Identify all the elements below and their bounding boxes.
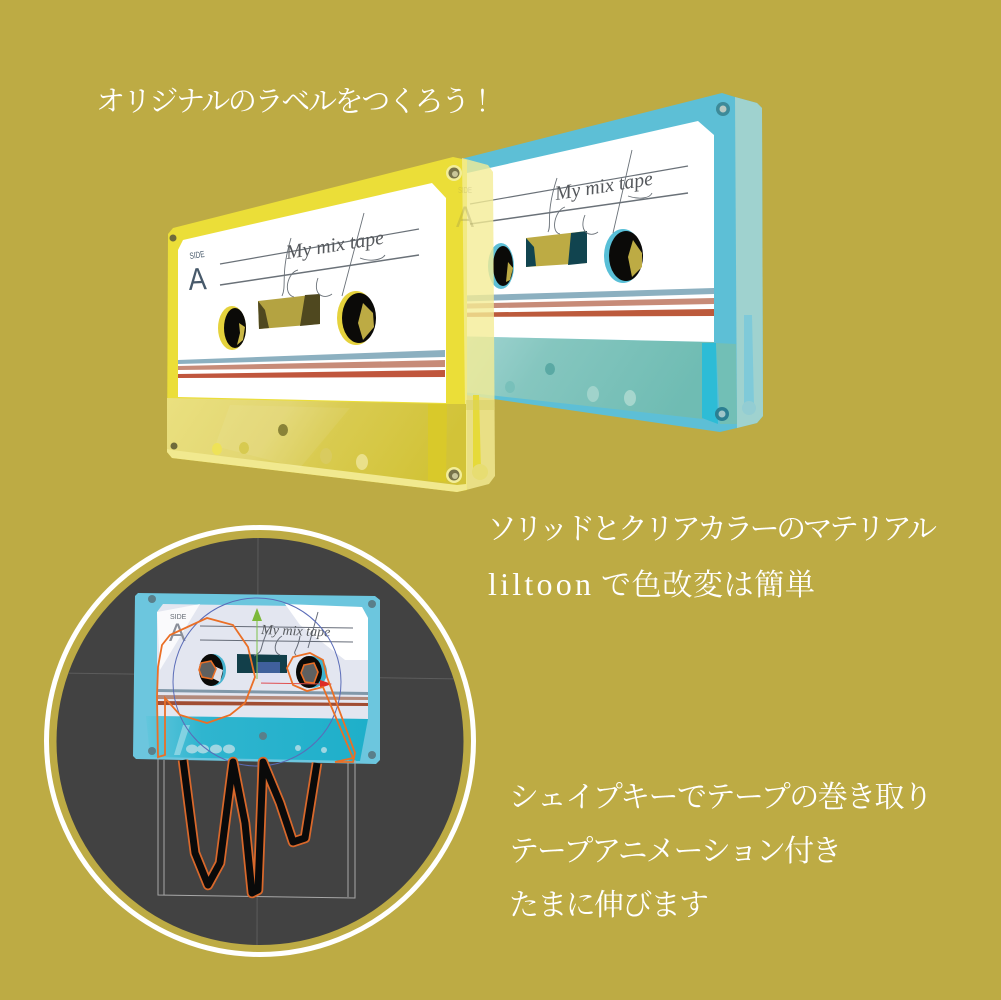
preview cassette lower holes	[186, 744, 327, 754]
gizmo up arrow	[252, 608, 262, 621]
dark disc	[56, 538, 464, 945]
ghost side text of blue cassette	[456, 186, 474, 234]
yellow cassette translucent side panel	[462, 158, 495, 490]
yellow cassette side text	[188, 249, 208, 297]
yellow cassette handwriting lines	[220, 213, 419, 297]
ghost side text of blue cassette: A	[456, 201, 474, 234]
preview cassette handwritten title: My mix tape	[260, 623, 331, 640]
yellow cassette handwritten title: My mix tape	[283, 227, 386, 264]
blue cassette stripes	[445, 288, 714, 302]
yellow cassette side text: A	[188, 261, 208, 297]
blue cassette left reel hole	[488, 243, 514, 289]
blue cassette label	[445, 121, 714, 342]
panel: unity preview circle	[46, 528, 474, 954]
yellow cassette left reel hole	[218, 306, 246, 350]
blue cassette window	[526, 231, 587, 267]
preview cassette screws	[148, 595, 376, 759]
blue cassette lower shell	[445, 336, 714, 419]
yellow cassette lower shell	[167, 398, 466, 489]
yellow cassette label	[178, 183, 446, 403]
caption: shape key: テープアニメーション付き	[509, 835, 842, 868]
caption: material: liltoon	[488, 566, 591, 602]
yellow cassette side text: SIDE	[189, 249, 205, 261]
tape loop	[183, 760, 317, 893]
preview cassette	[133, 593, 380, 764]
preview cassette lines	[200, 612, 353, 656]
caption: material: ソリッドとクリアカラーのマテリアル	[487, 513, 937, 546]
blue cassette lower holes	[505, 363, 636, 406]
blue cassette screws	[715, 102, 756, 421]
yellow cassette body	[167, 157, 467, 492]
yellow cassette screws	[170, 165, 488, 483]
orange reel outline left	[157, 618, 255, 757]
gizmo right arrow	[320, 680, 332, 688]
caption: shape key: たまに伸びます	[509, 889, 709, 922]
blue cassette body	[445, 93, 763, 432]
transform gizmo	[173, 598, 341, 766]
yellow cassette	[167, 157, 495, 492]
tape bounding box	[158, 757, 355, 898]
preview cassette window	[237, 654, 287, 684]
preview cassette stripes	[157, 689, 368, 695]
blue cassette right reel hole	[604, 229, 643, 283]
white ring	[46, 528, 474, 954]
preview cassette side text: SIDE	[170, 614, 187, 621]
preview cassette lower shell	[146, 716, 368, 761]
yellow cassette lower holes	[212, 424, 368, 470]
preview cassette side text: A	[169, 619, 186, 647]
caption: material: で色改変は簡単	[601, 569, 815, 602]
preview cassette body	[133, 593, 380, 764]
preview cassette right reel hole	[296, 656, 327, 688]
blue cassette handwritten title: My mix tape	[552, 168, 655, 205]
yellow cassette stripes	[178, 350, 445, 364]
preview cassette label	[157, 604, 368, 719]
blue cassette side panel	[735, 97, 763, 428]
caption: shape key	[509, 781, 933, 922]
caption: shape key: シェイプキーでテープの巻き取り	[509, 781, 933, 814]
title: オリジナルのラベルをつくろう！	[96, 86, 497, 118]
blue cassette handwriting lines	[470, 150, 688, 234]
yellow cassette window	[258, 294, 320, 329]
orange reel hubs	[199, 661, 318, 683]
caption: material	[487, 513, 937, 602]
ghost side text of blue cassette: SIDE	[458, 186, 472, 195]
orange reel outline right	[287, 653, 355, 762]
blue cassette	[445, 93, 763, 432]
yellow cassette right reel hole	[337, 291, 376, 345]
preview cassette left reel hole	[199, 654, 226, 686]
